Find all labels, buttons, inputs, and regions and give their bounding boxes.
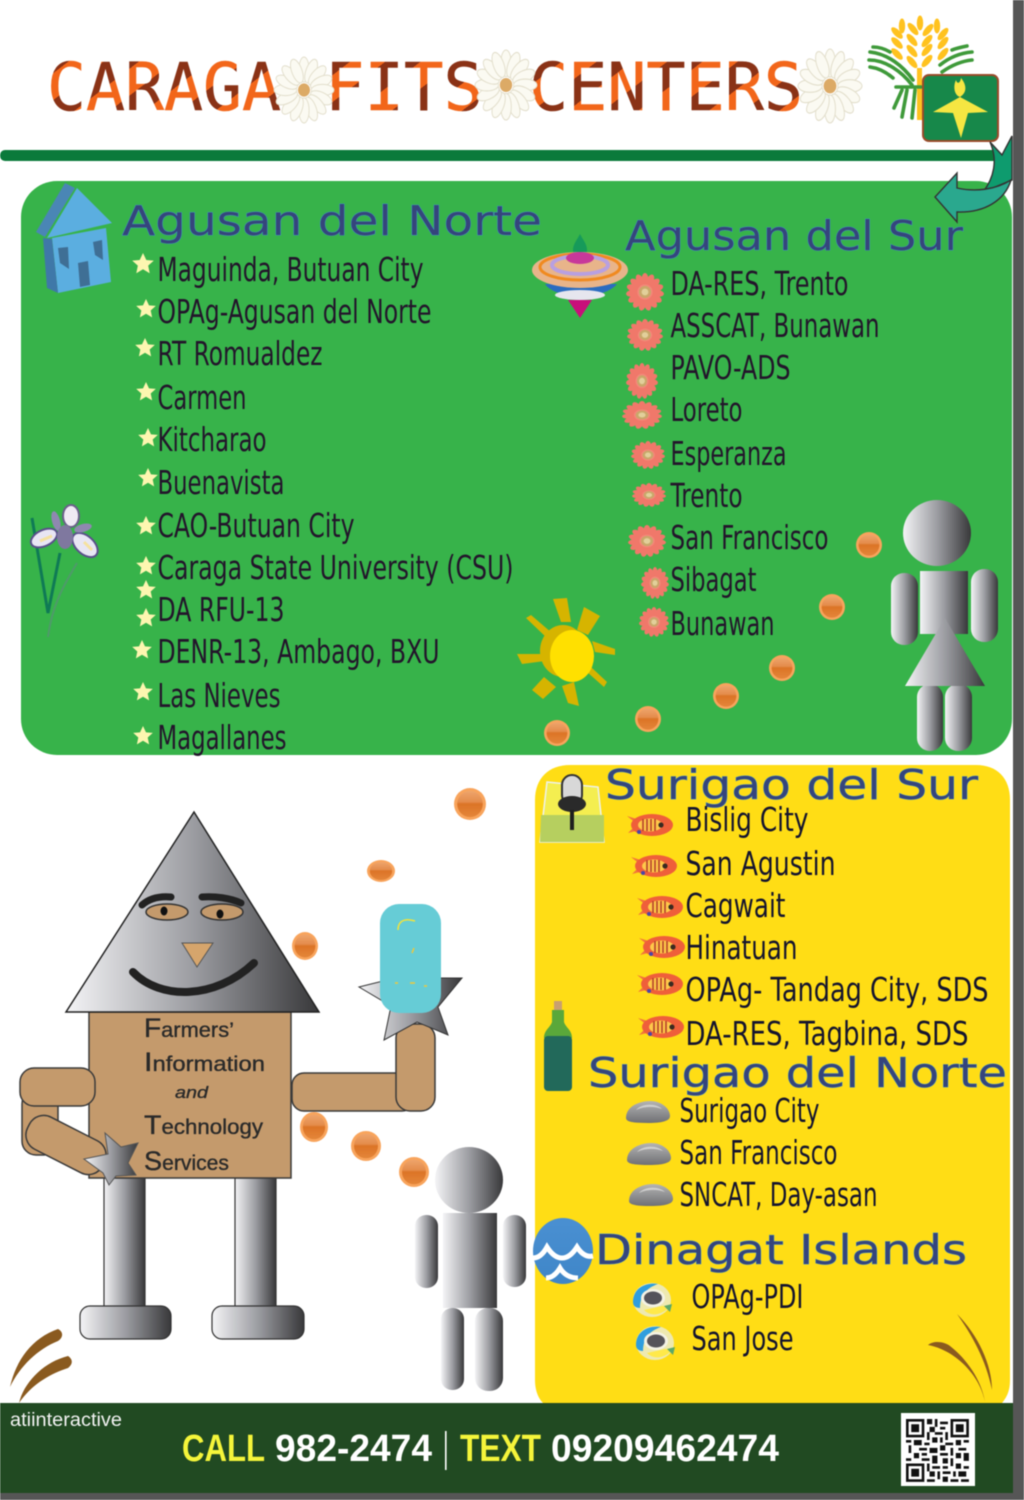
list: Agusan del Sur centers: Loreto xyxy=(670,390,742,429)
icon: blue water ball xyxy=(533,1218,593,1284)
list: Agusan del Sur centers xyxy=(670,264,880,643)
contact line: call and text numbers: TEXT xyxy=(460,1428,541,1470)
arrow: teal curved xyxy=(935,136,1012,222)
icon: blue house xyxy=(36,183,112,293)
icons: stone bullets xyxy=(626,1101,673,1206)
footer credit: atiinteractive: atiinteractive xyxy=(10,1410,122,1431)
heading: Agusan del Sur: Agusan del Sur xyxy=(625,212,963,260)
decoration: brown grass left xyxy=(10,1329,72,1403)
list: Agusan del Norte centers: Las Nieves xyxy=(158,676,280,715)
cyan bottle held by robot xyxy=(380,904,441,1013)
contact line: call and text numbers: 982-2474 xyxy=(275,1428,432,1470)
list: Agusan del Sur centers: Trento xyxy=(670,476,742,515)
list: Agusan del Sur centers: San Francisco xyxy=(670,518,828,557)
metal star in raised hand xyxy=(359,945,462,1040)
list: Agusan del Sur centers: Esperanza xyxy=(670,434,786,473)
list: Surigao del Sur centers: Hinatuan xyxy=(686,928,798,967)
icons: star bullets xyxy=(132,253,158,744)
list: Agusan del Sur centers: Bunawan xyxy=(670,604,774,643)
robot body label: Farmers' Information and Technology Services: Information xyxy=(144,1047,265,1077)
list: Agusan del Norte centers: CAO-Butuan City xyxy=(158,506,354,545)
icons: gerbera flower bullets xyxy=(622,273,669,637)
decoration: brown grass right xyxy=(928,1314,992,1402)
list: Surigao del Sur centers: San Agustin xyxy=(686,844,836,883)
title: Caraga FITS Centers: FITS xyxy=(325,49,483,126)
footer bar xyxy=(0,1403,1013,1493)
robot body xyxy=(89,1012,291,1178)
robot right arm xyxy=(292,1024,435,1111)
list: Surigao del Norte centers: San Francisco xyxy=(680,1133,838,1172)
title: Caraga FITS Centers: CARAGA xyxy=(47,49,281,126)
icon: green bottle xyxy=(544,1001,572,1091)
icon: spinning top xyxy=(532,234,628,318)
list: Agusan del Norte centers: DA RFU-13 xyxy=(158,590,284,629)
title: Caraga FITS Centers xyxy=(47,49,862,126)
QR code xyxy=(901,1413,975,1486)
list: Agusan del Norte centers: OPAg-Agusan del Norte xyxy=(158,292,432,331)
figure: grey female person xyxy=(891,500,998,751)
list: Agusan del Norte centers: Carmen xyxy=(158,378,246,417)
title: Caraga FITS Centers: CENTERS xyxy=(529,49,803,126)
contact line: call and text numbers: 09209462474 xyxy=(551,1428,779,1470)
icon: sun xyxy=(517,598,615,706)
list: Agusan del Norte centers xyxy=(158,250,514,757)
panel: Agusan provinces (green) xyxy=(21,181,1012,757)
list: Surigao del Norte centers: SNCAT, Day-asan xyxy=(680,1175,878,1214)
list: Agusan del Norte centers: Maguinda, Butuan City xyxy=(158,250,424,289)
list: Agusan del Norte centers: DENR-13, Ambago, BXU xyxy=(158,632,440,671)
panel: Surigao and Dinagat provinces (yellow) xyxy=(533,761,1010,1403)
list: Agusan del Norte centers: Caraga State University (CSU) xyxy=(158,548,514,587)
header rule xyxy=(0,150,1000,161)
heading: Surigao del Norte: Surigao del Norte xyxy=(588,1049,1007,1097)
robot body label: Farmers' Information and Technology Services: Technology xyxy=(144,1110,264,1140)
heading: Surigao del Sur: Surigao del Sur xyxy=(605,761,978,809)
robot body label: Farmers' Information and Technology Services: and xyxy=(175,1083,209,1102)
list: Surigao del Norte centers xyxy=(680,1091,878,1214)
robot face xyxy=(133,897,254,992)
icon: iris flower xyxy=(28,505,102,637)
contact line: call and text numbers: CALL xyxy=(182,1428,265,1470)
list: Agusan del Sur centers: DA-RES, Trento xyxy=(670,264,848,303)
icons: nest bullets xyxy=(633,1283,675,1360)
list: Agusan del Norte centers: RT Romualdez xyxy=(158,334,322,373)
logo: rice sheaf and green emblem xyxy=(869,16,998,141)
list: Agusan del Sur centers: PAVO-ADS xyxy=(670,348,790,387)
contact line: call and text numbers xyxy=(182,1428,779,1470)
list: Surigao del Sur centers: Bislig City xyxy=(686,800,808,839)
icons: fish bullets xyxy=(627,814,685,1038)
robot body label: Farmers' Information and Technology Services: Farmers’ xyxy=(144,1013,234,1043)
robot legs and feet xyxy=(80,1178,304,1339)
icon: microphone xyxy=(540,775,604,842)
list: Dinagat Islands centers: OPAg-PDI xyxy=(692,1277,804,1316)
robot head xyxy=(66,812,319,1012)
figure: FITS robot mascot xyxy=(20,812,462,1339)
list: Agusan del Sur centers: Sibagat xyxy=(670,560,757,599)
figure: grey person xyxy=(415,1147,526,1391)
list: Dinagat Islands centers: San Jose xyxy=(692,1319,794,1358)
robot body label: Farmers' Information and Technology Services: Services xyxy=(144,1146,229,1176)
list: Dinagat Islands centers xyxy=(692,1277,804,1358)
heading: Dinagat Islands: Dinagat Islands xyxy=(595,1226,967,1274)
list: Agusan del Norte centers: Buenavista xyxy=(158,463,284,502)
list: Agusan del Sur centers: ASSCAT, Bunawan xyxy=(670,306,880,345)
list: Surigao del Sur centers: Cagwait xyxy=(686,886,786,925)
list: Surigao del Sur centers xyxy=(686,800,988,1053)
robot body label: Farmers' Information and Technology Services xyxy=(144,1013,265,1176)
decoration: orange orbs in green panel xyxy=(544,532,882,746)
list: Agusan del Norte centers: Magallanes xyxy=(158,718,286,757)
metal star in lowered hand xyxy=(84,1133,138,1185)
list: Agusan del Norte centers: Kitcharao xyxy=(158,420,266,459)
robot left arm xyxy=(20,1068,112,1180)
decoration: orange orbs around robot xyxy=(292,788,486,1187)
heading: Agusan del Norte: Agusan del Norte xyxy=(122,197,542,245)
list: Surigao del Norte centers: Surigao City xyxy=(680,1091,820,1130)
